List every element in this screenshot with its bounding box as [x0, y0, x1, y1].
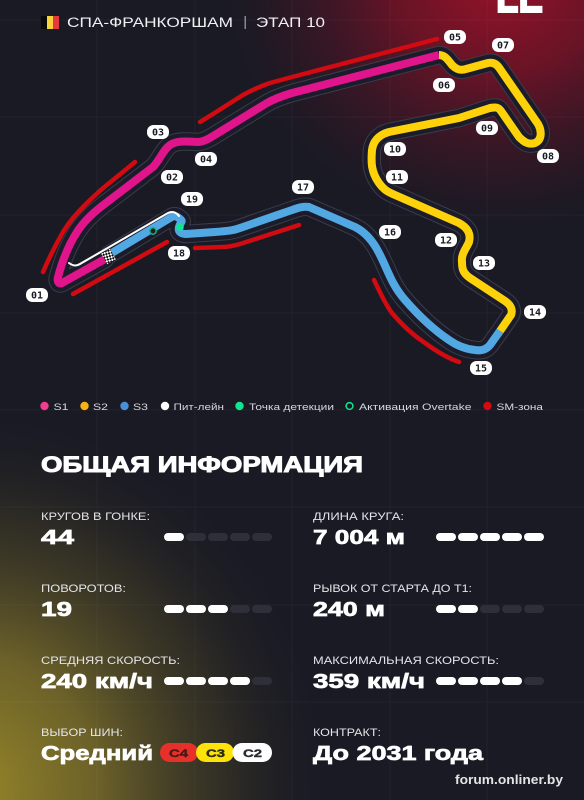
stat: top speed	[313, 655, 544, 693]
legend: Активация Overtake	[359, 402, 472, 413]
corner labels: 10	[389, 144, 401, 156]
round number: ЭТАП 10	[256, 15, 325, 30]
icon: Belgian flag	[41, 16, 59, 29]
corner labels: 12	[440, 236, 452, 246]
stat: lap length: ДЛИНА КРУГА:	[313, 511, 404, 523]
SM zones	[43, 39, 459, 362]
sector 2	[372, 55, 541, 331]
corner labels: 19	[186, 194, 198, 206]
legend: S1	[54, 402, 68, 413]
legend	[40, 402, 544, 413]
corner labels: 16	[384, 228, 396, 238]
corner labels: 14	[529, 308, 541, 318]
stat: run to turn 1: РЫВОК ОТ СТАРТА ДО Т1:	[313, 583, 472, 595]
stat: tyre choice: ВЫБОР ШИН:	[41, 727, 123, 739]
tyre compounds	[160, 743, 272, 762]
circuit name: СПА-ФРАНКОРШАМ	[67, 15, 233, 30]
corner labels: 04	[200, 154, 212, 166]
stat: run to turn 1: 240 м	[313, 599, 385, 621]
start line	[101, 249, 116, 264]
corner labels	[26, 30, 559, 375]
legend: SM-зона	[496, 402, 544, 413]
stat: contract	[313, 727, 484, 765]
corner labels: 01	[31, 290, 43, 302]
corner labels: 07	[497, 40, 509, 52]
stat: average speed: 240 км/ч	[41, 671, 153, 693]
corner labels: 09	[481, 124, 493, 134]
stat: contract: До 2031 года	[313, 743, 484, 765]
tyre compounds: C3	[206, 748, 225, 760]
stat: laps	[41, 511, 272, 549]
stat: tyre choice: Средний	[41, 743, 153, 765]
stat: average speed: СРЕДНЯЯ СКОРОСТЬ:	[41, 655, 180, 667]
stat: top speed: МАКСИМАЛЬНАЯ СКОРОСТЬ:	[313, 655, 499, 667]
track outline	[58, 55, 541, 350]
stat: laps: 44	[41, 527, 75, 549]
legend: Точка детекции	[249, 402, 334, 413]
corner labels: 08	[542, 152, 554, 162]
corner labels: 11	[391, 172, 403, 184]
detection point	[176, 223, 184, 231]
stat: corners: ПОВОРОТОВ:	[41, 583, 126, 595]
stat: average speed	[41, 655, 272, 693]
stat: tyre choice	[41, 727, 272, 765]
stat: corners	[41, 583, 272, 621]
stat: lap length	[313, 511, 544, 549]
stat: contract: КОНТРАКТ:	[313, 727, 381, 739]
corner labels: 17	[297, 182, 309, 194]
legend: S3	[133, 402, 148, 413]
header: flag and race title	[41, 15, 325, 30]
tyre compounds: C4	[169, 748, 189, 760]
corner labels: 13	[478, 258, 490, 270]
stat: top speed: 359 км/ч	[313, 671, 425, 693]
watermark: forum.onliner.by	[455, 772, 564, 787]
overtake activation	[150, 228, 156, 234]
stat: run to turn 1	[313, 583, 544, 621]
pit lane	[69, 212, 179, 265]
stat: laps: КРУГОВ В ГОНКЕ:	[41, 511, 150, 523]
track map	[43, 39, 541, 362]
legend: S2	[93, 402, 108, 413]
corner labels: 18	[173, 248, 185, 260]
corner labels: 06	[438, 80, 450, 92]
corner labels: 03	[152, 128, 164, 138]
corner labels: 15	[475, 364, 487, 374]
sector 3	[110, 207, 500, 350]
stat: corners: 19	[41, 599, 72, 621]
stat: lap length: 7 004 м	[313, 527, 405, 549]
sector 1	[58, 55, 439, 283]
legend: Пит-лейн	[174, 402, 224, 413]
corner labels: 05	[449, 32, 461, 44]
corner labels: 02	[166, 172, 178, 184]
heading: ОБЩАЯ ИНФОРМАЦИЯ	[41, 452, 363, 477]
tyre compounds: C2	[243, 748, 262, 760]
